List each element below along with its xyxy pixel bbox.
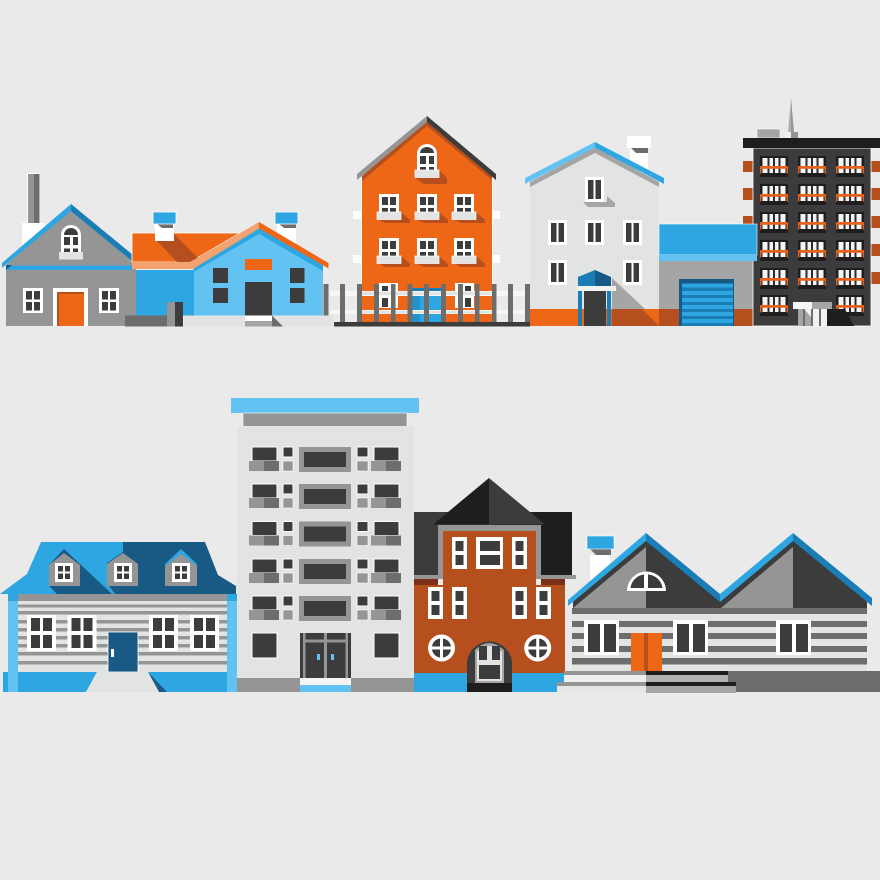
porch (577, 270, 616, 326)
house: mansard roof house with dormers (0, 542, 237, 692)
chimney (587, 536, 614, 585)
tower entrance (793, 302, 854, 326)
antenna (785, 98, 798, 138)
chimney left (153, 212, 176, 241)
top arched window (415, 144, 447, 184)
centre window (476, 537, 503, 569)
house: light blue bungalow with orange roof (125, 212, 333, 326)
half-round window (627, 572, 666, 591)
garage roof overlapping (659, 224, 757, 261)
house: twin gable house with siding (557, 533, 880, 693)
house: orange town house with fence (330, 116, 530, 326)
ground floor windows (379, 283, 474, 308)
house: pale grey house with blue roof (525, 136, 664, 326)
orange door (631, 633, 662, 671)
ledge (583, 196, 615, 207)
orange door (53, 288, 88, 326)
door (108, 632, 138, 672)
roller door (679, 279, 734, 326)
apartment tower: dark with balconies (659, 98, 880, 326)
garage (659, 261, 753, 326)
siding (18, 601, 227, 672)
dormer 3 (165, 549, 197, 586)
round window left (428, 634, 455, 662)
house: grey gabled house with blue roof (2, 173, 136, 326)
house: brick red house (414, 478, 576, 692)
fence (330, 284, 530, 326)
dormer 2 (107, 553, 138, 586)
chimney (627, 136, 651, 178)
attic arched window (59, 225, 83, 260)
round window right (524, 634, 551, 662)
entrance doors (300, 633, 351, 678)
steps and ground (557, 671, 880, 693)
dormer 1 (49, 553, 80, 586)
apartment block: pale grey high-rise (231, 398, 419, 692)
arched door (467, 642, 512, 692)
